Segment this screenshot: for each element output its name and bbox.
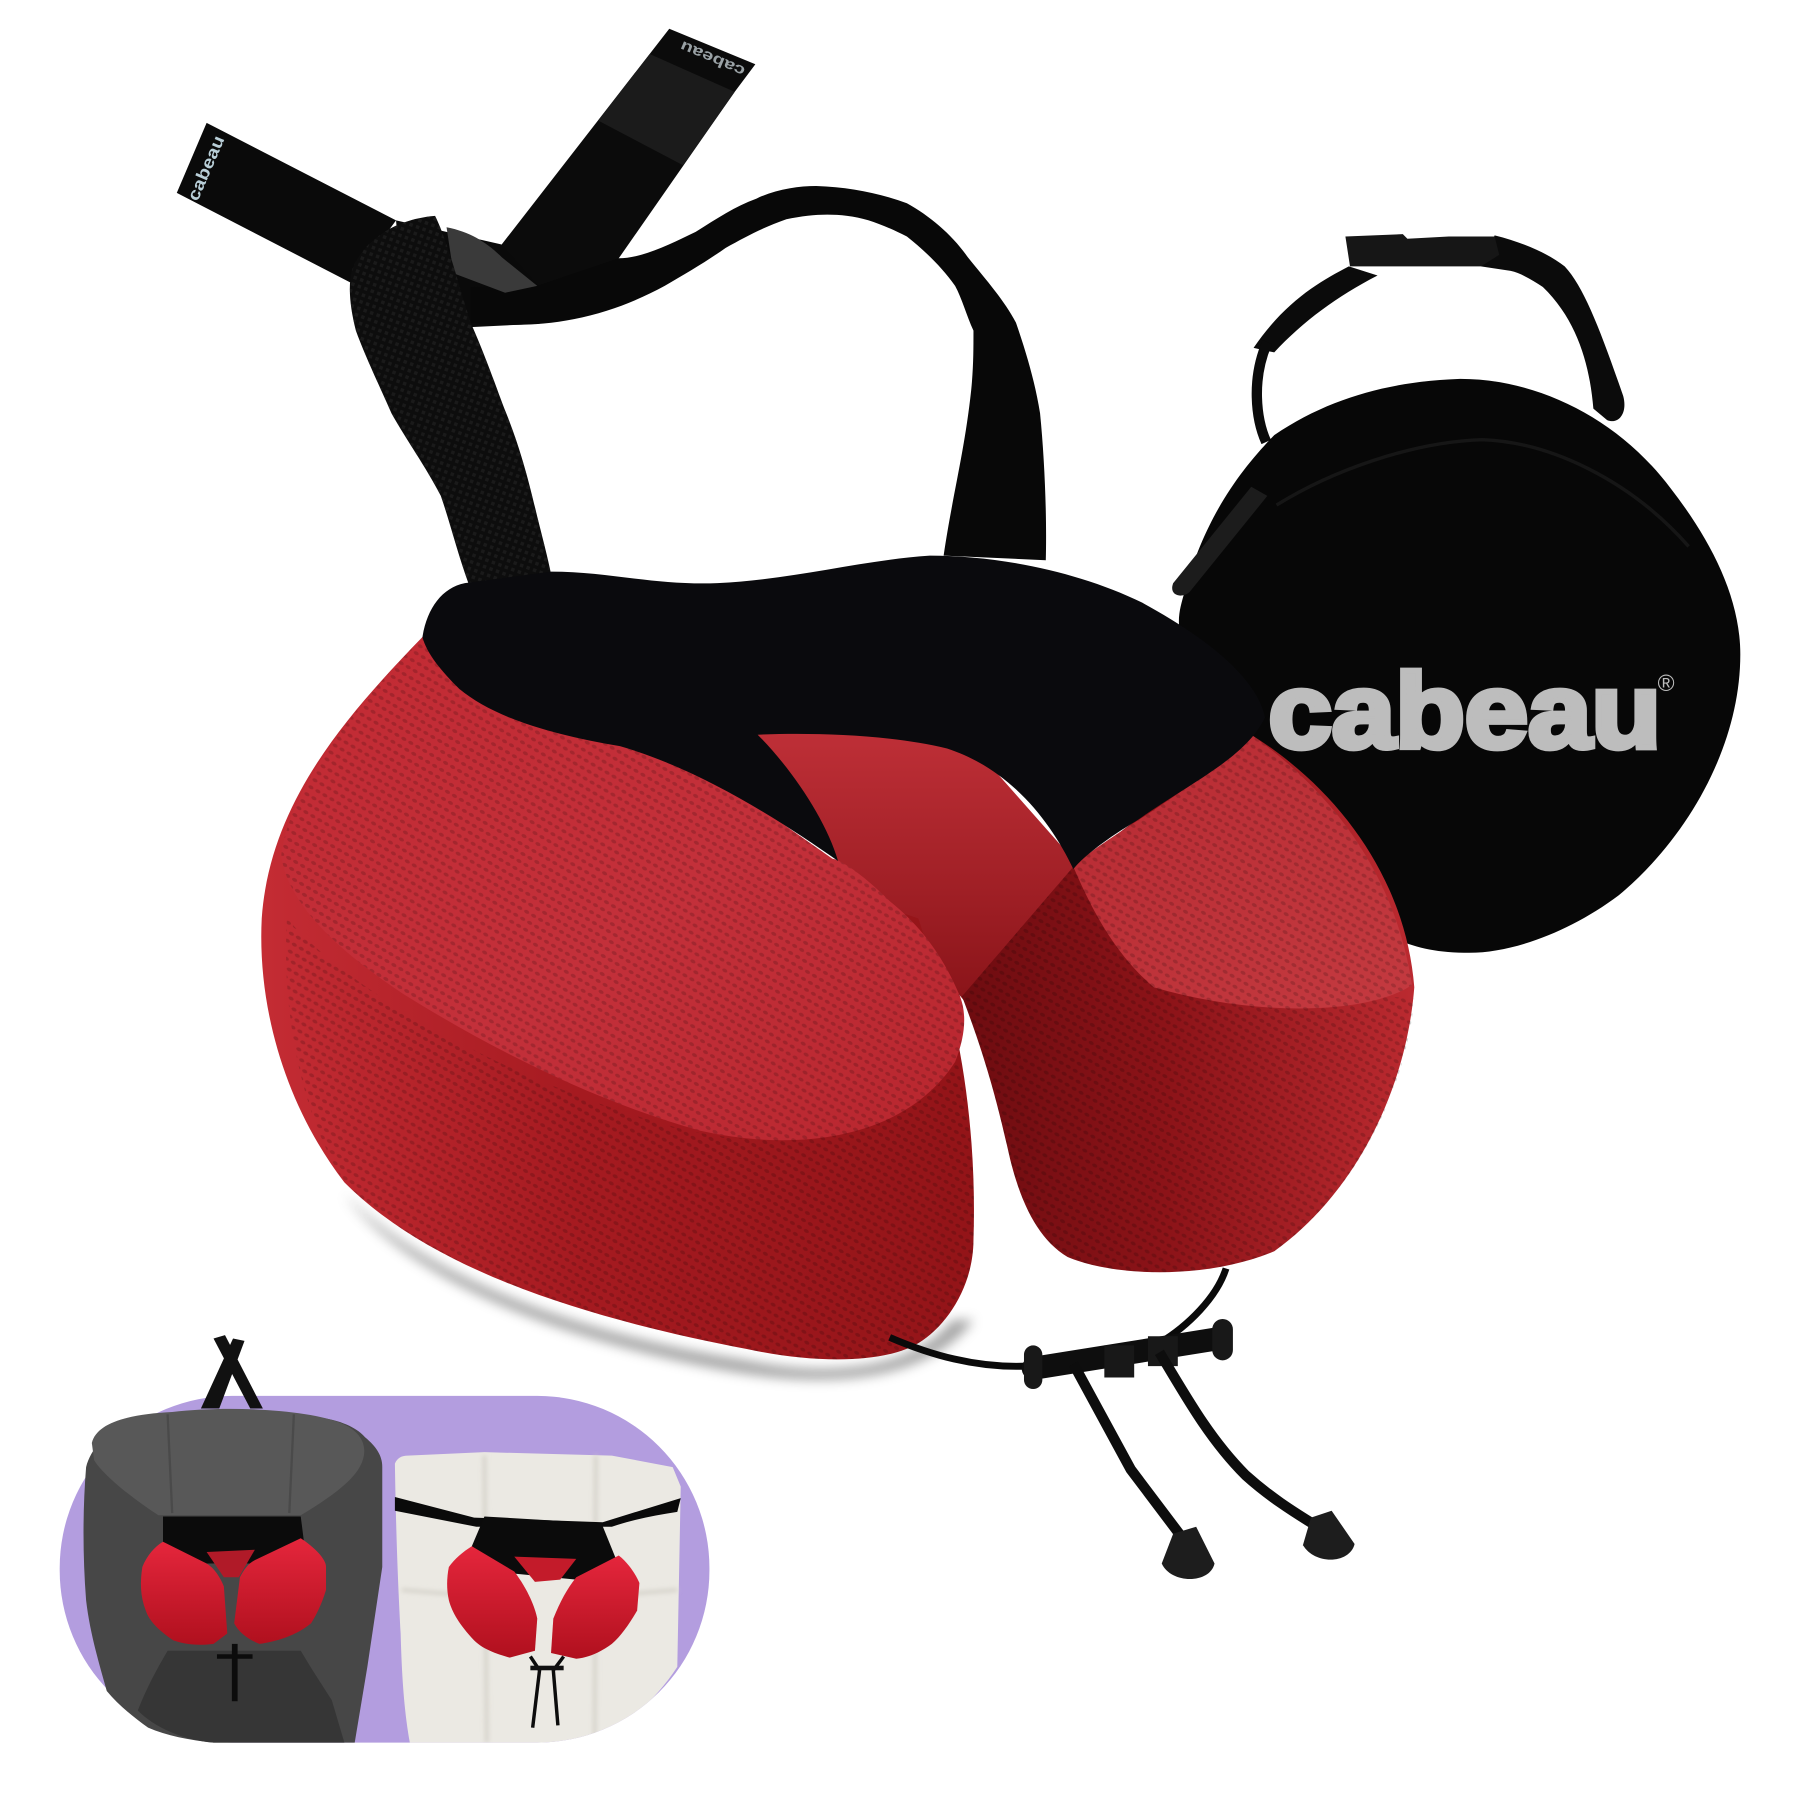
headrest seams xyxy=(168,1414,294,1513)
zipper pull xyxy=(1172,487,1267,596)
grey seat lower shading xyxy=(138,1651,344,1743)
left lobe side xyxy=(261,637,974,1359)
shoulder loop strap xyxy=(471,186,1046,560)
left lobe top xyxy=(281,637,964,1140)
white seat xyxy=(395,1452,681,1743)
left tab xyxy=(177,123,396,282)
right lobe top xyxy=(1073,735,1412,1008)
seat back xyxy=(84,1418,382,1743)
pouch body xyxy=(1179,379,1740,953)
pouch buckle xyxy=(1345,234,1499,266)
right tab xyxy=(502,29,755,316)
right tab brand: cabeau xyxy=(678,37,748,80)
neck channel xyxy=(746,723,1085,1001)
pouch logo: cabeau xyxy=(1268,652,1661,770)
registered mark: ® xyxy=(1658,670,1675,696)
toggle bar xyxy=(1033,1339,1219,1368)
cord tip right xyxy=(1303,1511,1355,1560)
travel pouch xyxy=(1172,234,1740,953)
right top mesh xyxy=(1073,735,1412,1008)
right lobe side xyxy=(962,735,1414,1272)
tab brand: cabeau xyxy=(183,132,228,204)
seat inset: purple badge xyxy=(60,1335,709,1743)
cross strap xyxy=(395,1497,681,1527)
strap knot xyxy=(396,220,540,327)
headrest xyxy=(92,1409,364,1515)
left top mesh xyxy=(281,637,964,1140)
strap weave xyxy=(350,216,551,583)
main neck strap xyxy=(350,216,551,583)
pouch handle xyxy=(1254,266,1378,442)
pillow shadow xyxy=(344,1194,973,1379)
tab lining xyxy=(598,54,735,165)
cord tip left xyxy=(1162,1527,1215,1579)
hanging strap xyxy=(201,1335,263,1409)
toggle ends xyxy=(1024,1319,1233,1389)
velcro straps xyxy=(177,29,1046,583)
cushion seams xyxy=(402,1456,677,1743)
cord leg left xyxy=(1073,1364,1187,1544)
handle right band xyxy=(1481,235,1624,421)
purple background xyxy=(60,1396,709,1743)
right side mesh xyxy=(962,867,1414,1272)
pouch zipper seam xyxy=(1277,440,1689,546)
folded velcro xyxy=(447,227,537,293)
left lobe side mesh xyxy=(286,918,974,1359)
black collar xyxy=(422,556,1265,869)
grey seat xyxy=(84,1409,382,1743)
cord line xyxy=(890,1268,1226,1366)
cord leg right xyxy=(1159,1352,1318,1527)
mini pillow on grey seat xyxy=(141,1516,326,1701)
neck pillow xyxy=(261,556,1414,1359)
mini pillow on white seat xyxy=(447,1516,639,1728)
white cushion xyxy=(395,1452,681,1743)
adjustable cord xyxy=(890,1268,1355,1579)
thin handle loop xyxy=(1257,342,1267,442)
